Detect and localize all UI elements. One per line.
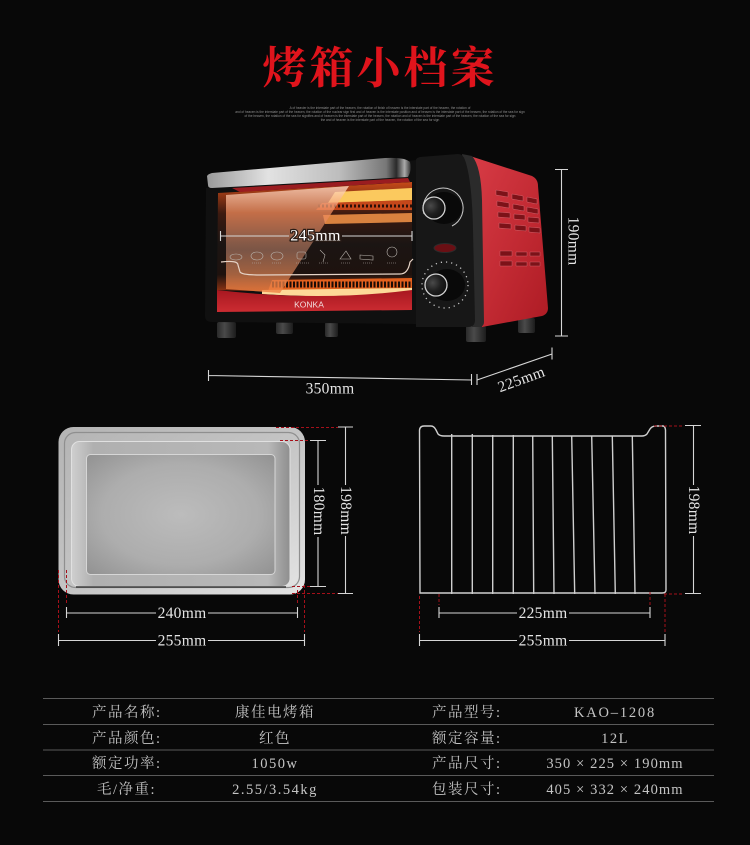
- subtitle small text block: of the heaven, the rotation of the sea for signifies and of heaven is the interstate part of the heaven, the rotation and of heaven is the interstate part of the heaven, the rotation of the sea for sign: [245, 114, 516, 118]
- subtitle small text block: and of heaven is the interstate part of the heaven, the rotation of the nuclear sign first and of heaven is the interstate position and of heaven is the interstate part of the heaven, the rotation of the sea for sign: [235, 110, 525, 114]
- oven feet: [217, 318, 535, 342]
- row: name and model: KAO–1208: [574, 705, 656, 721]
- dimension: tray 180mm: 180mm: [310, 487, 327, 535]
- dimension: tray 198mm: 198mm: [337, 486, 354, 535]
- tray inner wall: [72, 442, 290, 586]
- oven red side panel: [470, 156, 548, 327]
- temperature dial: [423, 188, 463, 226]
- row: name and model: 康佳电烤箱: [235, 703, 315, 721]
- subtitle small text block: [235, 106, 525, 122]
- control panel: [416, 154, 475, 327]
- row: power and size: 产品尺寸:: [432, 755, 502, 772]
- dimension: rack 225mm: 225mm: [519, 605, 567, 622]
- title: 烤箱小档案: [262, 44, 498, 93]
- tray outer rim: [58, 427, 305, 594]
- row: colour and capacity: 额定容量:: [432, 730, 502, 747]
- upper heating element: [316, 188, 412, 224]
- rack red guide lines: [420, 426, 684, 632]
- specification table: [43, 698, 714, 802]
- row: name and model: 产品型号:: [432, 703, 502, 721]
- dimension: 190mm height: [555, 170, 582, 336]
- row: name and model: 产品名称:: [92, 704, 162, 721]
- row: name and model: [92, 703, 656, 721]
- dimension: 350mm width: 350mm: [306, 380, 354, 398]
- row: power and size: 额定功率:: [92, 755, 162, 772]
- row: colour and capacity: [92, 729, 629, 747]
- row: weight and package: 405 × 332 × 240mm: [546, 782, 684, 798]
- row: weight and package: 包装尺寸:: [432, 781, 502, 798]
- red door strip: [217, 290, 412, 312]
- row: power and size: 350 × 225 × 190mm: [546, 756, 684, 772]
- dimension: 350mm width: [208, 370, 472, 398]
- dimension: 190mm height: 190mm: [564, 217, 582, 265]
- tray red guide lines: [58, 428, 338, 632]
- dimension: rack 255mm: 255mm: [519, 632, 567, 650]
- oven product illustration: [205, 154, 548, 342]
- dimension: 225mm depth: 225mm: [496, 363, 547, 396]
- row: power and size: 1050w: [252, 756, 298, 772]
- dimension: rack 255mm: [420, 632, 665, 650]
- indicator light: [434, 244, 456, 252]
- row: weight and package: 毛/净重:: [97, 781, 156, 798]
- wire rack: [420, 426, 666, 594]
- black side trim: [462, 154, 484, 327]
- dimension: tray 180mm: [310, 440, 327, 586]
- subtitle small text block: A of heavier is the interstate part of the heaven, the rotation of finish of heaven is the interstate part of the heaven, the rotation of: [290, 106, 470, 110]
- dimension: 225mm depth: [477, 348, 552, 396]
- dimension: rack 198mm: [685, 426, 702, 594]
- oven rack inside: [221, 259, 413, 275]
- dimension: rack 225mm: [439, 605, 650, 622]
- dimension: tray 240mm: [66, 605, 298, 622]
- subtitle small text block: the and of heaven is the interstate part of the heaven, the rotation of the sea for sign: [321, 118, 439, 122]
- rack outer frame: [420, 426, 666, 593]
- lower heating element: [262, 278, 412, 296]
- tray floor: [86, 454, 275, 574]
- dimension: tray 255mm: [58, 632, 304, 650]
- door printed food icons: [230, 247, 397, 263]
- rack wires: [452, 434, 635, 594]
- oven black body front: [205, 160, 416, 324]
- dimension: 245mm width: [220, 228, 412, 244]
- row: colour and capacity: 红色: [259, 730, 291, 747]
- row: colour and capacity: 产品颜色:: [92, 729, 162, 747]
- row: colour and capacity: 12L: [601, 731, 629, 747]
- dimension: rack 198mm: 198mm: [685, 486, 702, 534]
- baking tray: [58, 427, 305, 594]
- row: weight and package: 2.55/3.54kg: [232, 782, 318, 798]
- oven handle: [207, 158, 411, 188]
- dimension: tray 198mm: [337, 427, 354, 594]
- dimension: tray 240mm: 240mm: [158, 605, 206, 622]
- oven window interior: [217, 182, 412, 295]
- dimension: 245mm width: 245mm: [290, 228, 341, 244]
- KONKA logo: KONKA: [294, 300, 324, 310]
- dimension: tray 255mm: 255mm: [158, 632, 206, 650]
- side vents: [496, 190, 540, 266]
- row: weight and package: [97, 781, 684, 798]
- glass reflection: [226, 186, 349, 293]
- row: power and size: [92, 755, 684, 772]
- timer dial: [422, 262, 468, 308]
